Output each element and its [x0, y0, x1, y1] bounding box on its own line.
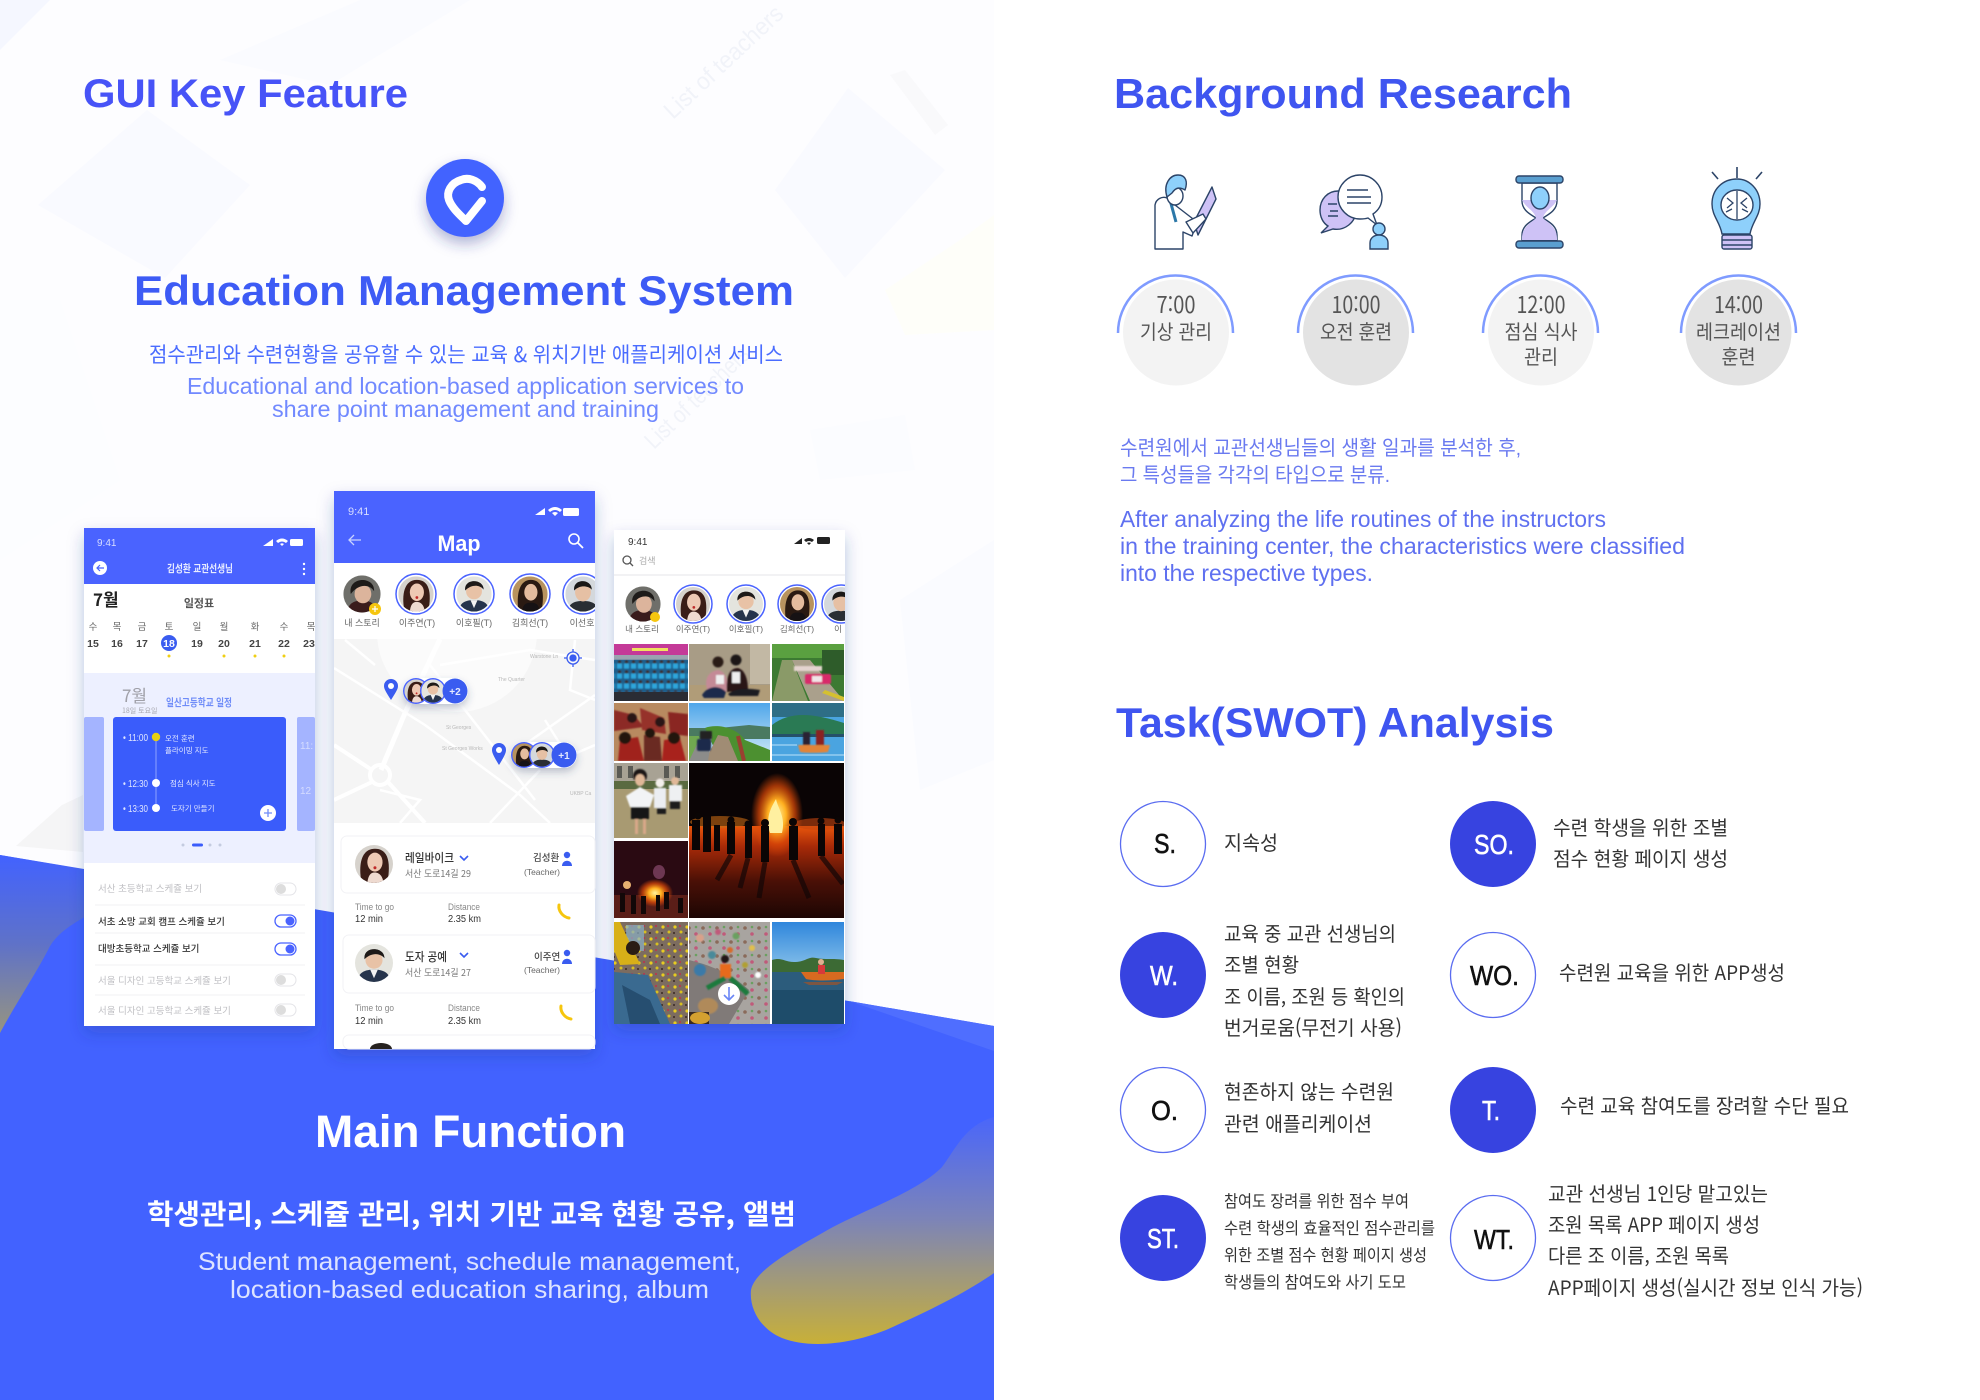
SWOT W: 조별 현황 — [1224, 949, 1299, 978]
map view: UKBP Ca — [570, 791, 592, 797]
schedule circle: 12:00: 관리 — [1524, 341, 1558, 370]
calendar strip: 7월 — [93, 586, 119, 611]
photo: group portrait — [614, 644, 688, 701]
map header bar — [334, 491, 595, 563]
map view — [334, 639, 595, 823]
research paragraph English: After analyzing the life routines of the instructors — [1120, 506, 1606, 532]
schedule cards panel: 도자기 만들기 — [171, 804, 214, 813]
blue bottom field — [0, 855, 994, 1400]
photo: climbing wall — [689, 922, 770, 1024]
story avatars: 이호필(T) — [456, 617, 492, 628]
research paragraph English — [1120, 506, 1685, 586]
left panel background: List of teachers — [639, 341, 755, 454]
calendar strip — [87, 586, 316, 658]
schedule cards panel: 18일 토요일 — [122, 706, 158, 716]
activity times 1: 2.35 km — [448, 914, 481, 925]
activity list card 2: 이주연 — [534, 949, 560, 963]
calendar strip: 화 — [251, 622, 260, 633]
SWOT WT: 다른 조 이름, 조원 목록 — [1548, 1240, 1729, 1269]
schedule circle: 7:00 — [1118, 276, 1233, 386]
phone: album screen — [614, 530, 860, 1024]
schedule circle: 12:00: 점심 식사 — [1504, 316, 1578, 345]
subtitle English: share point management and training — [272, 396, 659, 422]
calendar strip: 일정표 — [184, 595, 214, 611]
calendar strip: 목 — [307, 622, 316, 633]
schedule cards panel: 일산고등학교 일정 — [166, 695, 232, 710]
SWOT ST: ST. — [1147, 1223, 1179, 1254]
schedule header bar: 9:41 — [97, 538, 117, 549]
schedule circle: 12:00: 12:00 — [1516, 286, 1566, 320]
research paragraph Korean: 그 특성들을 각각의 타입으로 분류. — [1120, 464, 1390, 487]
activity times 2: Time to go — [355, 1003, 394, 1014]
album story avatars: 김희선(T) — [780, 624, 814, 634]
story avatars: 이선호 — [570, 618, 594, 628]
map view: Warstone Ln — [530, 654, 558, 660]
calendar strip: 15 — [87, 638, 99, 650]
location target icon — [564, 649, 582, 667]
lighter blue band — [849, 1001, 994, 1051]
main function English description: Student management, schedule management, — [198, 1248, 741, 1276]
title: Education Management System: Education Management System — [134, 267, 794, 314]
SWOT W: 교육 중 교관 선생님의 — [1224, 918, 1396, 947]
calendar strip: 목 — [113, 622, 122, 633]
calendar strip: 23 — [303, 638, 315, 650]
photo: rail bike — [772, 644, 844, 701]
school schedule toggles: 대방초등학교 스케쥴 보기 — [98, 943, 199, 955]
activity list card 1: 레일바이크 — [405, 849, 454, 866]
SWOT SO: 수련 학생을 위한 조별 — [1553, 812, 1728, 841]
SWOT ST: 학생들의 참여도와 사기 도모 — [1224, 1269, 1406, 1293]
SWOT SO: 점수 현황 페이지 생성 — [1553, 843, 1728, 872]
SWOT ST: 참여도 장려를 위한 점수 부여 — [1224, 1188, 1409, 1212]
calendar strip: 토 — [165, 622, 174, 633]
main function Korean description: 학생관리, 스케쥴 관리, 위치 기반 교육 현황 공유, 앨범 — [147, 1193, 796, 1233]
schedule circle: 7:00: 기상 관리 — [1140, 316, 1212, 345]
research paragraph Korean: 수련원에서 교관선생님들의 생활 일과를 분석한 후, — [1120, 437, 1521, 460]
album status and search: 9:41 — [628, 537, 648, 548]
SWOT WT — [1450, 1178, 1863, 1301]
SWOT S: 지속성 — [1224, 827, 1278, 856]
album story avatars: 이 — [834, 624, 842, 634]
gradient blob right — [751, 1117, 994, 1344]
activity list card 1: 서산 도로14길 29 — [405, 866, 471, 880]
photo: mountain road — [689, 703, 770, 761]
map header bar: 9:41 — [348, 506, 369, 518]
school schedule toggles: 서울 디자인 고등학교 스케쥴 보기 — [98, 1006, 231, 1017]
SWOT S: S. — [1154, 828, 1176, 859]
SWOT ST: 수련 학생의 효율적인 점수관리를 — [1224, 1215, 1435, 1239]
schedule header bar: 김성환 교관선생님 — [167, 561, 233, 576]
icon: lightbulb with brain — [1712, 167, 1762, 249]
story avatars — [343, 574, 603, 628]
subtitle English: Educational and location-based application services to — [187, 373, 744, 399]
research paragraph Korean — [1120, 437, 1521, 487]
schedule circle: 7:00: 7:00 — [1156, 286, 1196, 320]
schedule cards panel: • 11:00 — [123, 733, 148, 744]
SWOT O: 관련 애플리케이션 — [1224, 1108, 1372, 1137]
activity list card 3 (cut off) — [343, 1035, 595, 1049]
school schedule toggles: 서울 디자인 고등학교 스케쥴 보기 — [98, 976, 231, 987]
schedule header bar — [84, 528, 315, 584]
activity list card 1: 김성환 — [533, 850, 559, 864]
SWOT O: 현존하지 않는 수련원 — [1224, 1076, 1394, 1105]
album story avatars: 내 스토리 — [625, 624, 659, 634]
photo: bonfire large — [689, 763, 844, 918]
activity list card 1: (Teacher) — [524, 867, 560, 877]
schedule cards panel: • 13:30 — [123, 804, 148, 815]
album story avatars: 이호필(T) — [729, 624, 763, 634]
album status and search — [614, 537, 845, 576]
album status and search: 검색 — [639, 554, 656, 567]
icon: hourglass — [1516, 176, 1563, 248]
activity list card 2: (Teacher) — [524, 965, 560, 975]
school schedule toggles — [95, 883, 305, 1017]
school schedule toggles: 서산 초등학교 스케쥴 보기 — [98, 884, 202, 895]
schedule cards panel: • 12:30 — [123, 779, 148, 790]
SWOT S — [1120, 802, 1278, 886]
activity times 2 — [355, 1003, 571, 1027]
subtitle English — [187, 373, 744, 422]
SWOT WT: WT. — [1474, 1224, 1514, 1255]
schedule cards panel: 오전 훈련 — [165, 733, 195, 743]
activity times 1: Distance — [448, 902, 480, 913]
activity times 2: 2.35 km — [448, 1016, 481, 1027]
map view: The Quarter — [498, 677, 525, 683]
calendar strip: 수 — [89, 622, 98, 633]
schedule cards panel: 점심 식사 지도 — [170, 778, 216, 788]
map view: St Georges Works — [442, 746, 483, 752]
icon: download button — [718, 983, 740, 1005]
schedule cards panel — [84, 673, 315, 863]
photo: two students — [689, 644, 770, 701]
SWOT O — [1120, 1068, 1394, 1152]
map marker group 1 — [384, 678, 468, 704]
SWOT WT: APP페이지 생성(실시간 정보 인식 가능) — [1548, 1272, 1863, 1301]
schedule circle: 10:00: 오전 훈련 — [1320, 316, 1392, 345]
calendar strip: 16 — [111, 638, 123, 650]
photo: canoe on lake — [772, 922, 844, 1024]
activity list card 2: 도자 공예 — [405, 948, 447, 965]
schedule cards panel: 12 — [300, 786, 312, 797]
heading: Background Research: Background Research — [1114, 70, 1572, 117]
photo grid — [614, 644, 846, 1024]
research paragraph English: into the respective types. — [1120, 560, 1373, 586]
photo: night campfire small — [614, 841, 688, 918]
SWOT WO: 수련원 교육을 위한 APP생성 — [1559, 957, 1785, 986]
SWOT W: 조 이름, 조원 등 확인의 — [1224, 981, 1405, 1010]
SWOT T: T. — [1482, 1095, 1500, 1126]
calendar strip: 21 — [249, 638, 261, 650]
SWOT WT: 조원 목록 APP 페이지 생성 — [1548, 1209, 1760, 1238]
heading: Main Function: Main Function — [315, 1106, 626, 1157]
school schedule toggles: 서초 소망 교회 캠프 스케쥴 보기 — [98, 916, 225, 928]
SWOT T — [1450, 1067, 1849, 1153]
SWOT WO: WO. — [1470, 960, 1519, 991]
schedule circle: 14:00: 레크레이션 — [1696, 316, 1781, 345]
schedule circle: 14:00: 14:00 — [1714, 286, 1763, 320]
activity times 1 — [355, 902, 569, 925]
left panel background — [0, 0, 994, 1400]
heading: Task(SWOT) Analysis: Task(SWOT) Analysis — [1116, 699, 1554, 746]
icon: instructor reading — [1155, 175, 1216, 249]
schedule circle: 14:00 — [1681, 276, 1796, 386]
phone: map screen — [334, 491, 603, 1049]
activity list card 2: 서산 도로14길 27 — [405, 965, 471, 979]
calendar strip: 일 — [193, 622, 201, 633]
activity list card 2 — [343, 935, 595, 993]
calendar strip: 22 — [278, 638, 290, 650]
SWOT WT: 교관 선생님 1인당 맡고있는 — [1548, 1178, 1768, 1207]
SWOT WO — [1450, 932, 1785, 1018]
SWOT SO: SO. — [1474, 829, 1514, 860]
calendar strip: 17 — [136, 638, 148, 650]
map marker group 2 — [492, 742, 577, 768]
research paragraph English: in the training center, the characteristics were classified — [1120, 533, 1685, 559]
calendar strip: 금 — [138, 622, 147, 633]
activity list card 1 — [341, 836, 595, 893]
SWOT ST: 위한 조별 점수 현황 페이지 생성 — [1224, 1242, 1427, 1266]
SWOT SO — [1450, 801, 1728, 887]
icon: app logo — [426, 159, 504, 237]
calendar strip: 수 — [280, 622, 289, 633]
SWOT O: O. — [1151, 1095, 1178, 1126]
activity times 2: 12 min — [355, 1016, 383, 1027]
story avatars: 이주연(T) — [399, 618, 435, 628]
schedule circle: 10:00 — [1298, 276, 1413, 386]
gradient blob left — [0, 855, 90, 1033]
schedule cards panel: 플라이밍 지도 — [165, 745, 209, 755]
photo: students in red — [614, 703, 688, 761]
album story avatars: 이주연(T) — [676, 624, 710, 634]
phone: schedule screen — [84, 528, 316, 1026]
story avatars: 김희선(T) — [512, 617, 548, 628]
calendar strip: 18 — [163, 638, 175, 650]
schedule cards panel: 11: — [300, 741, 313, 752]
SWOT W — [1120, 918, 1405, 1041]
schedule circle: 14:00: 훈련 — [1722, 341, 1756, 370]
SWOT W: 번거로움(무전기 사용) — [1224, 1012, 1402, 1041]
map header bar: Map — [438, 531, 480, 556]
schedule circle: 12:00 — [1483, 276, 1598, 386]
heading: GUI Key Feature: GUI Key Feature — [83, 72, 408, 116]
map marker group 2: +1 — [558, 751, 570, 762]
album story avatars — [625, 585, 860, 634]
calendar strip: 월 — [220, 621, 228, 633]
activity times 1: 12 min — [355, 914, 383, 925]
schedule cards panel: 7월 — [122, 682, 147, 707]
map view: St Georges — [446, 725, 472, 731]
photo: indoor climbing from above — [614, 922, 688, 1024]
main function English description: location-based education sharing, album — [230, 1276, 709, 1304]
activity times 2: Distance — [448, 1003, 480, 1014]
subtitle Korean: 점수관리와 수련현황을 공유할 수 있는 교육 & 위치기반 애플리케이션 서비스 — [149, 339, 783, 369]
schedule circle: 10:00: 10:00 — [1332, 286, 1380, 320]
icon: speech bubbles — [1320, 175, 1388, 249]
SWOT ST — [1120, 1188, 1435, 1293]
SWOT T: 수련 교육 참여도를 장려할 수단 필요 — [1560, 1090, 1849, 1119]
story avatars: 내 스토리 — [344, 618, 380, 628]
calendar strip: 20 — [218, 638, 230, 650]
activity times 1: Time to go — [355, 902, 394, 913]
main function English description — [198, 1248, 741, 1304]
photo: campers walking — [614, 763, 688, 838]
photo: lake boat — [772, 703, 844, 761]
map marker group 1: +2 — [449, 687, 461, 698]
SWOT W: W. — [1150, 960, 1178, 991]
calendar strip: 19 — [191, 638, 203, 650]
